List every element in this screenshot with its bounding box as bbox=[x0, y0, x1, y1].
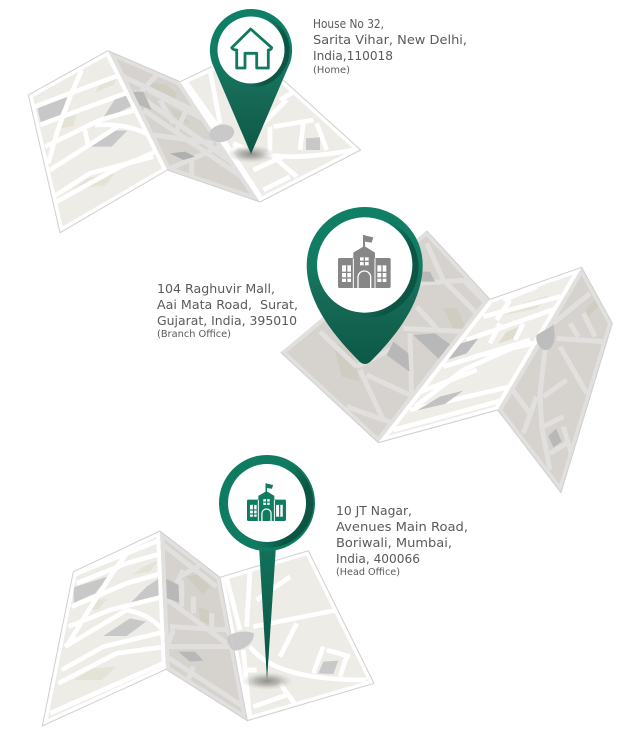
pin: branch office bbox=[307, 207, 423, 364]
pin: head office bbox=[219, 455, 315, 680]
address: head office: (Head Office) bbox=[336, 567, 400, 578]
map outline bbox=[42, 531, 374, 726]
icon: school building grey bbox=[338, 235, 391, 288]
icon: school building green bbox=[247, 483, 286, 521]
address: branch office: Gujarat, India, 395010 bbox=[157, 314, 297, 328]
address: home: House No 32, bbox=[313, 17, 384, 31]
pin shadow: top bbox=[227, 145, 275, 163]
map panel: middle fold bbox=[380, 275, 572, 441]
map panel: right fold bbox=[498, 267, 612, 493]
map panel: middle fold bbox=[160, 531, 247, 721]
map: bottom folded map bbox=[42, 531, 374, 726]
map plaza bbox=[536, 325, 555, 350]
map: top folded map bbox=[28, 51, 361, 233]
map panel: left fold bbox=[33, 56, 162, 226]
address: head office: Avenues Main Road, bbox=[336, 520, 468, 534]
address: head office bbox=[336, 504, 468, 578]
map panel: right fold bbox=[180, 63, 361, 202]
map outline bbox=[281, 231, 612, 493]
map panel: left fold bbox=[281, 231, 490, 443]
map plaza bbox=[227, 632, 254, 651]
map panel: left fold bbox=[48, 538, 162, 719]
address: home: India,110018 bbox=[313, 49, 393, 63]
map plaza bbox=[207, 122, 236, 144]
icon: house bbox=[232, 29, 272, 68]
address: head office: India, 400066 bbox=[336, 552, 420, 566]
map: middle folded map bbox=[281, 231, 612, 493]
address: branch office: 104 Raghuvir Mall, bbox=[157, 282, 275, 296]
address: branch office: (Branch Office) bbox=[157, 329, 231, 340]
pin: home bbox=[210, 9, 292, 154]
address: home: Sarita Vihar, New Delhi, bbox=[313, 33, 467, 47]
address: head office: Boriwali, Mumbai, bbox=[336, 536, 452, 550]
address: branch office bbox=[157, 282, 298, 340]
map panel: right fold bbox=[224, 556, 368, 715]
pin shadow: bottom bbox=[241, 672, 293, 690]
map panel: middle fold bbox=[108, 51, 260, 202]
address: branch office: Aai Mata Road, Surat, bbox=[157, 298, 298, 312]
address: head office: 10 JT Nagar, bbox=[336, 504, 412, 518]
address: home: (Home) bbox=[313, 65, 350, 76]
address: home bbox=[313, 17, 467, 76]
map outline bbox=[28, 51, 361, 233]
